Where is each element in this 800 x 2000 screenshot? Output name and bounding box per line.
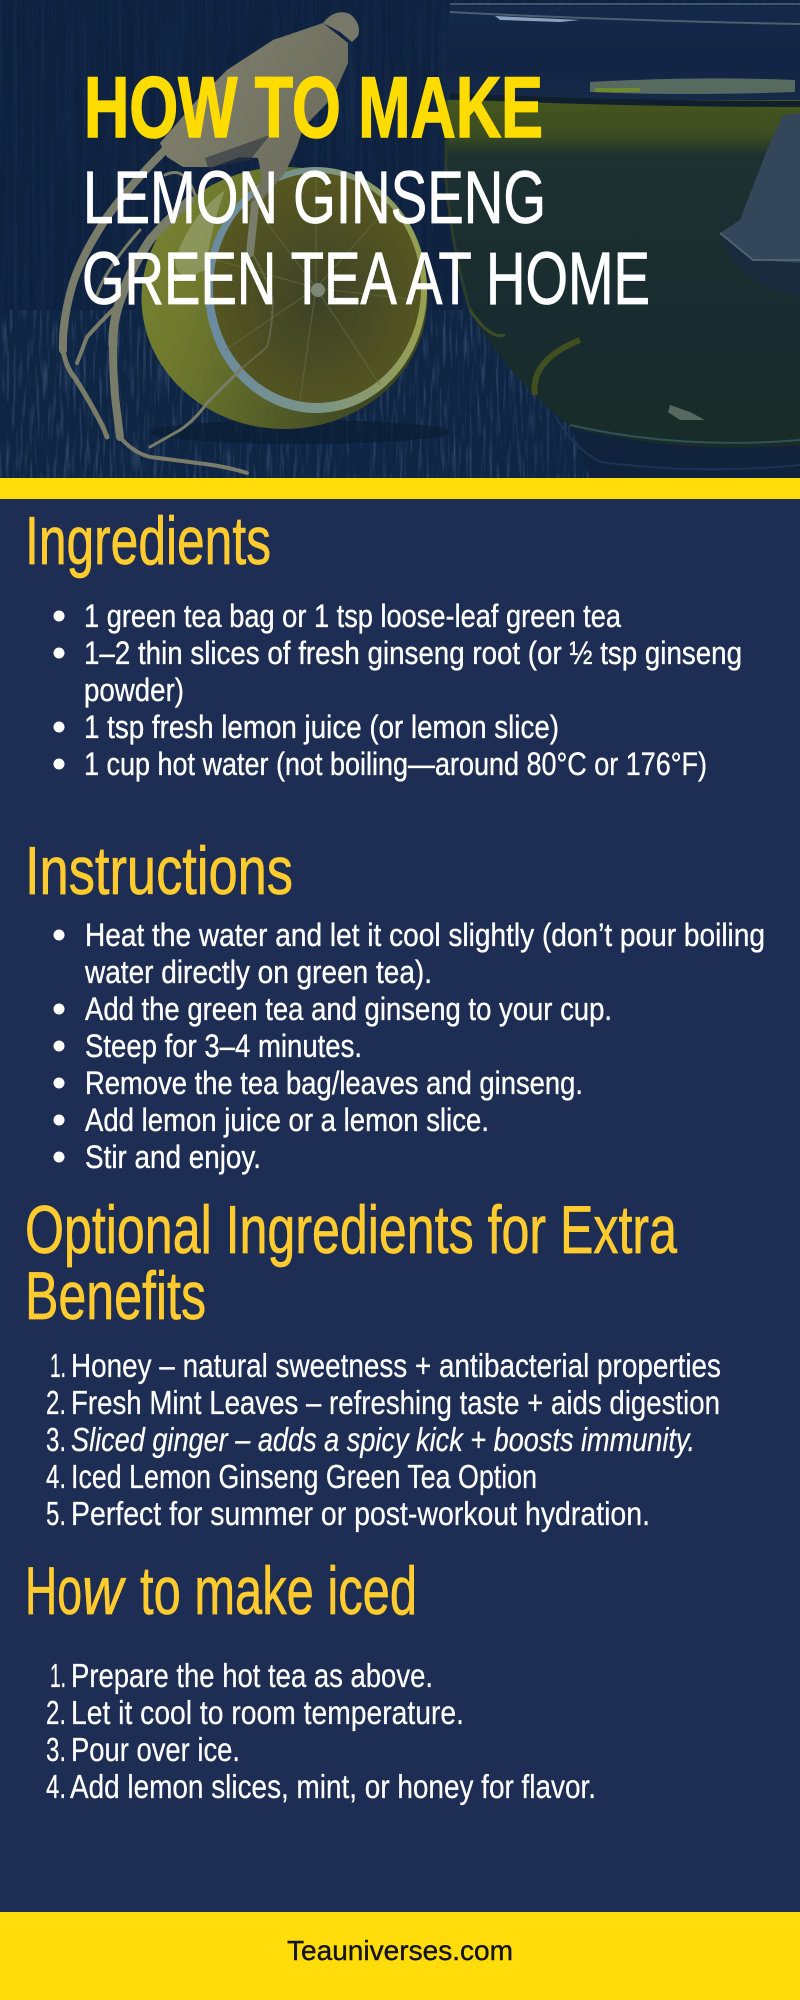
optional ingredients numbered list: Perfect for summer or post-workout hydration. [71, 1495, 650, 1532]
heading: instructions: Instructions [25, 833, 293, 909]
optional ingredients numbered list: Iced Lemon Ginseng Green Tea Option [71, 1458, 537, 1495]
iced tea numbered list: Pour over ice. [71, 1731, 240, 1768]
iced tea numbered list: 3. [46, 1731, 66, 1768]
heading: optional ingredients for extra benefits: Benefits [25, 1258, 206, 1334]
ingredients list: powder) [84, 672, 184, 708]
iced tea numbered list: Prepare the hot tea as above. [71, 1657, 433, 1694]
instructions list: Stir and enjoy. [85, 1139, 261, 1175]
optional ingredients numbered list: 3. [46, 1421, 66, 1458]
iced tea numbered list: 2. [46, 1694, 66, 1731]
instructions list: Add lemon juice or a lemon slice. [85, 1102, 489, 1138]
lemon [142, 167, 428, 429]
heading: optional ingredients for extra benefits [25, 1192, 677, 1334]
iced tea numbered list: 1. [50, 1657, 66, 1694]
instructions list: Remove the tea bag/leaves and ginseng. [85, 1065, 583, 1101]
ginseng root [63, 12, 359, 473]
title line: lemon ginseng: LEMON GINSENG [83, 156, 546, 239]
footer band [0, 1912, 800, 2000]
ingredients list [54, 598, 742, 782]
yellow divider band [0, 478, 800, 499]
title [82, 60, 650, 320]
iced tea numbered list: 4. [46, 1768, 66, 1805]
heading: how to make iced: Ho [25, 1553, 82, 1629]
ingredients list: 1 tsp fresh lemon juice (or lemon slice) [84, 709, 559, 745]
iced tea numbered list: Let it cool to room temperature. [71, 1694, 464, 1731]
title line: how to make: HOW TO MAKE [84, 60, 543, 156]
optional ingredients numbered list: 1. [50, 1347, 66, 1384]
tea bag [720, 113, 800, 263]
heading: how to make iced [25, 1553, 417, 1629]
heading: ingredients: Ingredients [25, 503, 271, 579]
heading: how to make iced: to make iced [140, 1553, 417, 1629]
instructions list: Add the green tea and ginseng to your cup. [85, 991, 612, 1027]
footer website text: Teauniverses.com [287, 1935, 513, 1966]
glass of tea [446, 4, 800, 478]
iced tea numbered list [46, 1657, 596, 1805]
ingredients list: 1 green tea bag or 1 tsp loose-leaf green tea [84, 598, 621, 634]
instructions list: water directly on green tea). [84, 954, 432, 990]
hero photo: ginseng, lemon and glass of green tea [0, 0, 800, 478]
optional ingredients numbered list: 4. [46, 1458, 66, 1495]
instructions list: Steep for 3–4 minutes. [85, 1028, 362, 1064]
iced tea numbered list: Add lemon slices, mint, or honey for flavor. [70, 1768, 596, 1805]
optional ingredients numbered list: 5. [46, 1495, 66, 1532]
optional ingredients numbered list [46, 1347, 721, 1532]
heading: how to make iced: w [82, 1553, 126, 1629]
instructions list [54, 917, 765, 1175]
optional ingredients numbered list: 2. [46, 1384, 66, 1421]
